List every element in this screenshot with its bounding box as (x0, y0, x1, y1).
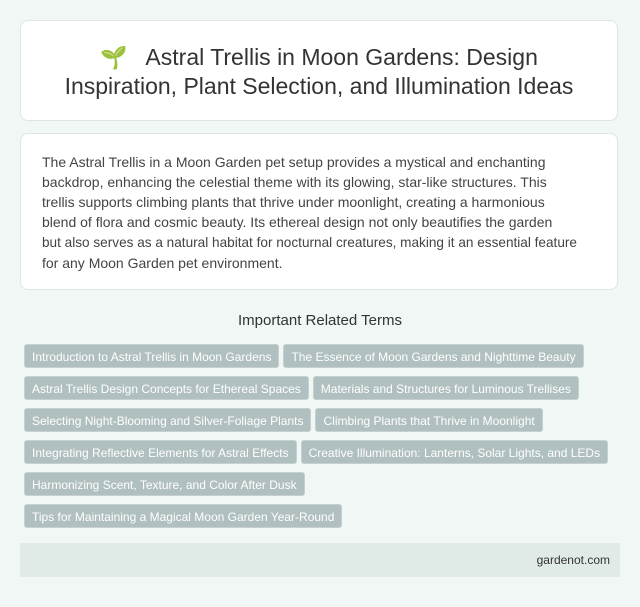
tags: Selecting Night-Blooming and Silver-Foliage Plants (32, 414, 303, 428)
tags: The Essence of Moon Gardens and Nighttime Beauty (291, 350, 576, 364)
description: The Astral Trellis in a Moon Garden pet setup provides a mystical and enchanting (42, 154, 546, 170)
description: but also serves as a natural habitat for nocturnal creatures, making it an essential feature (42, 235, 577, 250)
terms heading: Important Related Terms (238, 312, 402, 329)
description (20, 133, 618, 290)
tags: Climbing Plants that Thrive in Moonlight (323, 414, 535, 428)
tags: Integrating Reflective Elements for Astral Effects (32, 446, 289, 460)
tags (24, 344, 608, 528)
description: for any Moon Garden pet environment. (42, 255, 282, 271)
tags: Astral Trellis Design Concepts for Ethereal Spaces (32, 382, 301, 396)
title: Inspiration, Plant Selection, and Illumination Ideas (65, 73, 573, 99)
tags: Harmonizing Scent, Texture, and Color After Dusk (32, 478, 297, 492)
tags: Introduction to Astral Trellis in Moon Gardens (32, 350, 271, 364)
tags: Tips for Maintaining a Magical Moon Garden Year-Round (32, 510, 334, 524)
tags: Creative Illumination: Lanterns, Solar Lights, and LEDs (309, 446, 600, 460)
tags: Materials and Structures for Luminous Trellises (321, 382, 571, 396)
footer (20, 543, 620, 577)
title (20, 20, 618, 121)
description: blend of flora and cosmic beauty. Its ethereal design not only beautifies the garden (42, 214, 552, 230)
description: trellis supports climbing plants that thrive under moonlight, creating a harmonious (42, 194, 545, 210)
footer: gardenot.com (537, 553, 610, 567)
description: backdrop, enhancing the celestial theme with its glowing, star-like structures. This (42, 174, 547, 190)
title: 🌱 Astral Trellis in Moon Gardens: Design (100, 44, 538, 70)
